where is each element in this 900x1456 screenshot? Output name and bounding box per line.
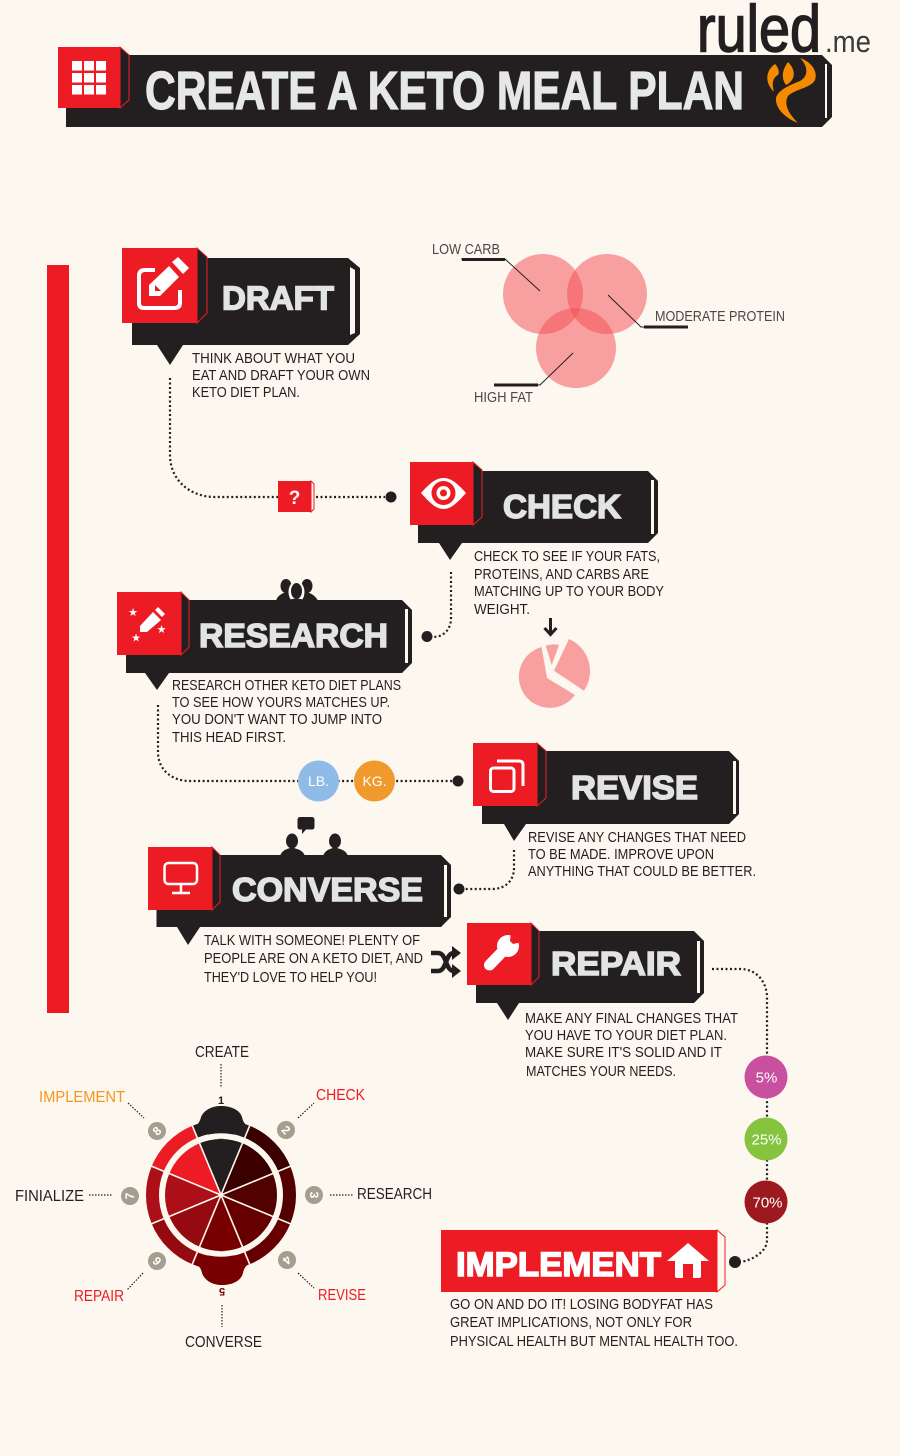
wheel top bump — [192, 1106, 250, 1140]
icon: eye — [421, 478, 466, 509]
venn diagram: MODERATE PROTEIN — [655, 308, 785, 325]
heading: repair: REPAIR — [551, 945, 681, 982]
text: draft — [192, 350, 370, 401]
text: revise: ANYTHING THAT COULD BE BETTER. — [528, 863, 756, 880]
text: revise: TO BE MADE. IMPROVE UPON — [528, 846, 714, 863]
icon: copy squares — [490, 761, 523, 792]
icon: monitor — [164, 863, 197, 893]
wheel numbers: 1 — [218, 1095, 224, 1107]
connector: draft to check — [170, 378, 396, 502]
text: check — [474, 548, 664, 618]
text: research: TO SEE HOW YOURS MATCHES UP. — [172, 694, 390, 711]
text: check: CHECK TO SEE IF YOUR FATS, — [474, 548, 660, 565]
text: check: PROTEINS, AND CARBS ARE — [474, 566, 649, 583]
text: check: MATCHING UP TO YOUR BODY — [474, 583, 664, 600]
panel: repair — [467, 923, 738, 1080]
icon: house — [667, 1243, 709, 1278]
icon: down arrow — [544, 618, 556, 634]
wheel labels: REVISE — [318, 1287, 366, 1304]
connector: research to revise — [158, 705, 464, 786]
wheel labels — [15, 1044, 432, 1351]
text: research: YOU DON'T WANT TO JUMP INTO — [172, 711, 382, 728]
text: implement: PHYSICAL HEALTH BUT MENTAL HEALTH TOO. — [450, 1333, 738, 1350]
logo wordmark: .me — [825, 24, 871, 59]
text: implement: GO ON AND DO IT! LOSING BODYFAT HAS — [450, 1296, 713, 1313]
wheel labels: RESEARCH — [357, 1186, 432, 1203]
heading: implement: IMPLEMENT — [456, 1246, 661, 1284]
pie chart — [519, 639, 590, 708]
badge: kg — [354, 760, 395, 802]
wheel bottom bump — [193, 1250, 251, 1285]
badge: 70% — [744, 1180, 788, 1224]
panel: implement — [441, 1230, 738, 1350]
icon: question box: ? — [289, 488, 300, 509]
text: check: WEIGHT. — [474, 601, 530, 618]
wheel numbers: 4 — [279, 1253, 294, 1268]
badge: 70%: 70% — [752, 1194, 783, 1212]
text: research — [172, 677, 401, 746]
wheel separators and ring — [150, 1124, 292, 1266]
text: repair: MATCHES YOUR NEEDS. — [526, 1063, 676, 1080]
text: converse: PEOPLE ARE ON A KETO DIET, AND — [204, 950, 423, 967]
text: converse: TALK WITH SOMEONE! PLENTY OF — [204, 932, 420, 949]
timeline bar — [47, 265, 69, 1013]
badge: 5%: 5% — [756, 1070, 777, 1086]
wheel numbers: 3 — [307, 1192, 321, 1199]
title: CREATE A KETO MEAL PLAN — [145, 61, 744, 121]
text: repair: MAKE SURE IT'S SOLID AND IT — [525, 1044, 722, 1061]
badge: 25% — [744, 1118, 788, 1160]
text: revise — [528, 829, 756, 880]
text: revise: REVISE ANY CHANGES THAT NEED — [528, 829, 746, 846]
icon: talking people — [280, 817, 348, 856]
connector: revise to converse — [454, 850, 514, 894]
badge: kg: KG. — [362, 773, 387, 789]
venn diagram — [432, 241, 785, 406]
wheel labels: CONVERSE — [185, 1334, 262, 1351]
wheel numbers: 6 — [149, 1253, 164, 1268]
icon: wrench — [490, 932, 522, 965]
text: converse: THEY'D LOVE TO HELP YOU! — [204, 969, 377, 986]
text: draft: EAT AND DRAFT YOUR OWN — [192, 367, 370, 384]
badge: lb: LB. — [308, 773, 329, 789]
venn diagram: LOW CARB — [432, 241, 500, 258]
panel: check — [410, 462, 664, 618]
icon: edit pencil — [139, 257, 189, 308]
wheel diagram — [150, 1106, 292, 1285]
icon: shuffle arrows — [431, 946, 461, 978]
text: repair: MAKE ANY FINAL CHANGES THAT — [525, 1010, 738, 1027]
wheel numbers: 2 — [279, 1123, 294, 1138]
text: draft: KETO DIET PLAN. — [192, 384, 300, 401]
badge: 25%: 25% — [751, 1132, 782, 1148]
wheel outer band — [152, 1126, 290, 1264]
icon: flame figure logo — [767, 58, 816, 123]
heading: check: CHECK — [503, 488, 621, 525]
wheel labels: REPAIR — [74, 1288, 124, 1305]
wheel labels: CREATE — [195, 1044, 249, 1061]
heading: revise: REVISE — [571, 769, 698, 806]
badge: 5% — [744, 1056, 788, 1098]
badge: lb — [298, 760, 339, 802]
text: implement: GREAT IMPLICATIONS, NOT ONLY FOR — [450, 1314, 692, 1331]
header banner — [58, 47, 832, 127]
panel: draft — [122, 248, 370, 401]
wheel labels: IMPLEMENT — [39, 1089, 125, 1106]
text: research: RESEARCH OTHER KETO DIET PLANS — [172, 677, 401, 694]
panel: revise — [473, 743, 756, 880]
text: converse — [204, 932, 423, 986]
wheel labels: FINIALIZE — [15, 1188, 84, 1205]
wheel numbers: 5 — [219, 1285, 225, 1297]
connector: repair to implement — [712, 969, 767, 1268]
icon: question box — [278, 481, 314, 512]
wheel inner slices — [165, 1139, 277, 1251]
text: research: THIS HEAD FIRST. — [172, 729, 286, 746]
wheel labels: CHECK — [316, 1087, 366, 1104]
icon: pencil with stars: ★ — [157, 623, 167, 636]
text: implement — [450, 1296, 738, 1350]
text: repair: YOU HAVE TO YOUR DIET PLAN. — [525, 1027, 727, 1044]
wheel numbers: 7 — [123, 1192, 137, 1199]
wheel numbers — [121, 1095, 323, 1297]
wheel numbers: 8 — [150, 1123, 165, 1138]
icon: pencil with stars: ★ — [131, 632, 141, 644]
panel: converse — [148, 847, 451, 986]
heading: draft: DRAFT — [222, 280, 334, 316]
heading: research: RESEARCH — [199, 617, 388, 654]
venn diagram: HIGH FAT — [474, 389, 533, 406]
icon: research people — [276, 579, 318, 603]
wheel leader lines — [89, 1064, 353, 1327]
connector: check to research — [422, 572, 451, 642]
icon: pencil with stars — [128, 606, 167, 644]
panel: research — [117, 592, 412, 746]
icon: grid — [72, 61, 106, 94]
heading: converse: CONVERSE — [232, 871, 423, 908]
icon: pencil with stars: ★ — [128, 606, 138, 619]
text: repair — [525, 1010, 738, 1080]
text: draft: THINK ABOUT WHAT YOU — [192, 350, 355, 367]
